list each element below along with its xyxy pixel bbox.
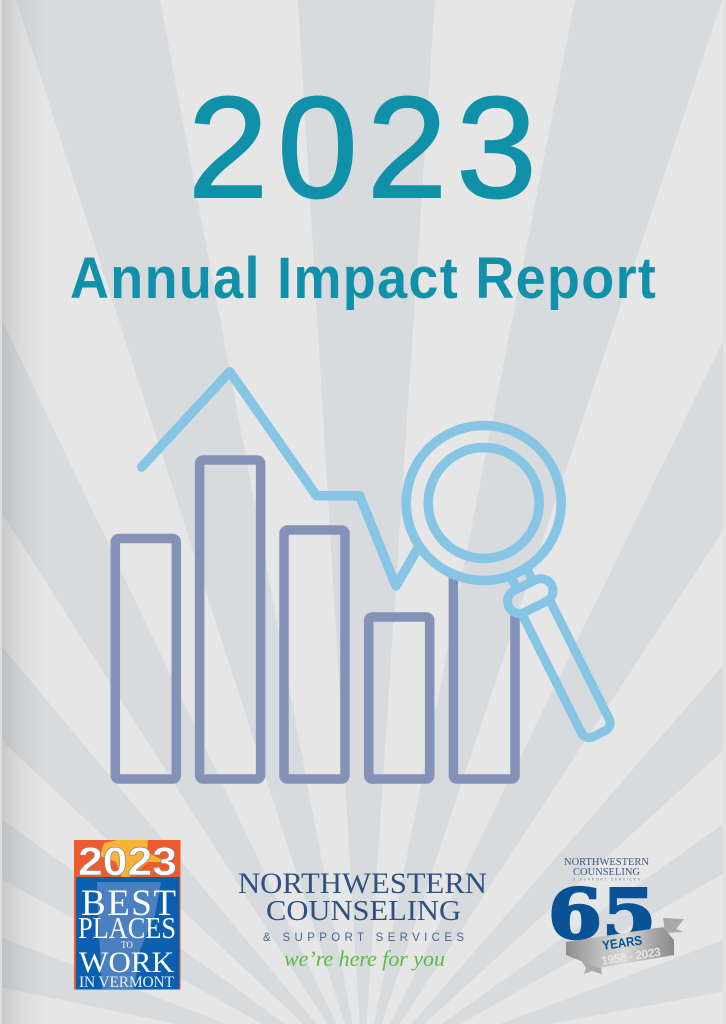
- badge: Best Places to Work in Vermont 2023: PLACES: [78, 910, 176, 945]
- magnifying glass: [406, 426, 621, 744]
- logo: 65 years anniversary: [548, 856, 684, 974]
- logo: 65 years anniversary: & SUPPORT SERVICES: [573, 878, 641, 882]
- badge: Best Places to Work in Vermont 2023: TO: [121, 940, 133, 950]
- logo: Northwestern Counseling: NORTHWESTERN: [238, 867, 487, 900]
- logo: 65 years anniversary: 1958 - 2023: [600, 945, 662, 968]
- title: 2023: 2023: [188, 67, 546, 228]
- trend line: [142, 372, 418, 586]
- logo: Northwestern Counseling: [238, 867, 487, 971]
- Vermont state shape: [97, 882, 161, 989]
- icon: bar chart with trend line and magnifying glass: [115, 372, 621, 779]
- logo: 65 years anniversary: COUNSELING: [573, 866, 640, 878]
- logo: Northwestern Counseling: we’re here for you: [284, 946, 445, 971]
- logo: 65 years anniversary: YEARS: [601, 933, 643, 953]
- bar chart: [115, 460, 515, 779]
- logo: 65 years anniversary: 65: [548, 875, 656, 955]
- badge: Best Places to Work in Vermont 2023: IN VERMONT: [79, 974, 175, 991]
- badge: Best Places to Work in Vermont 2023: 2023: [78, 840, 177, 884]
- badge: Best Places to Work in Vermont 2023: [74, 840, 180, 991]
- badge: Best Places to Work in Vermont 2023: WORK: [79, 946, 174, 979]
- logo: 65 years anniversary: NORTHWESTERN: [564, 856, 649, 868]
- badge: Best Places to Work in Vermont 2023: BEST: [81, 883, 176, 924]
- heading: Annual Impact Report: Annual Impact Report: [70, 245, 656, 310]
- logo: Northwestern Counseling: COUNSELING: [266, 896, 461, 927]
- logo: Northwestern Counseling: & SUPPORT SERVICES: [263, 932, 464, 944]
- ribbon: [663, 918, 684, 933]
- sun shape: [100, 840, 166, 878]
